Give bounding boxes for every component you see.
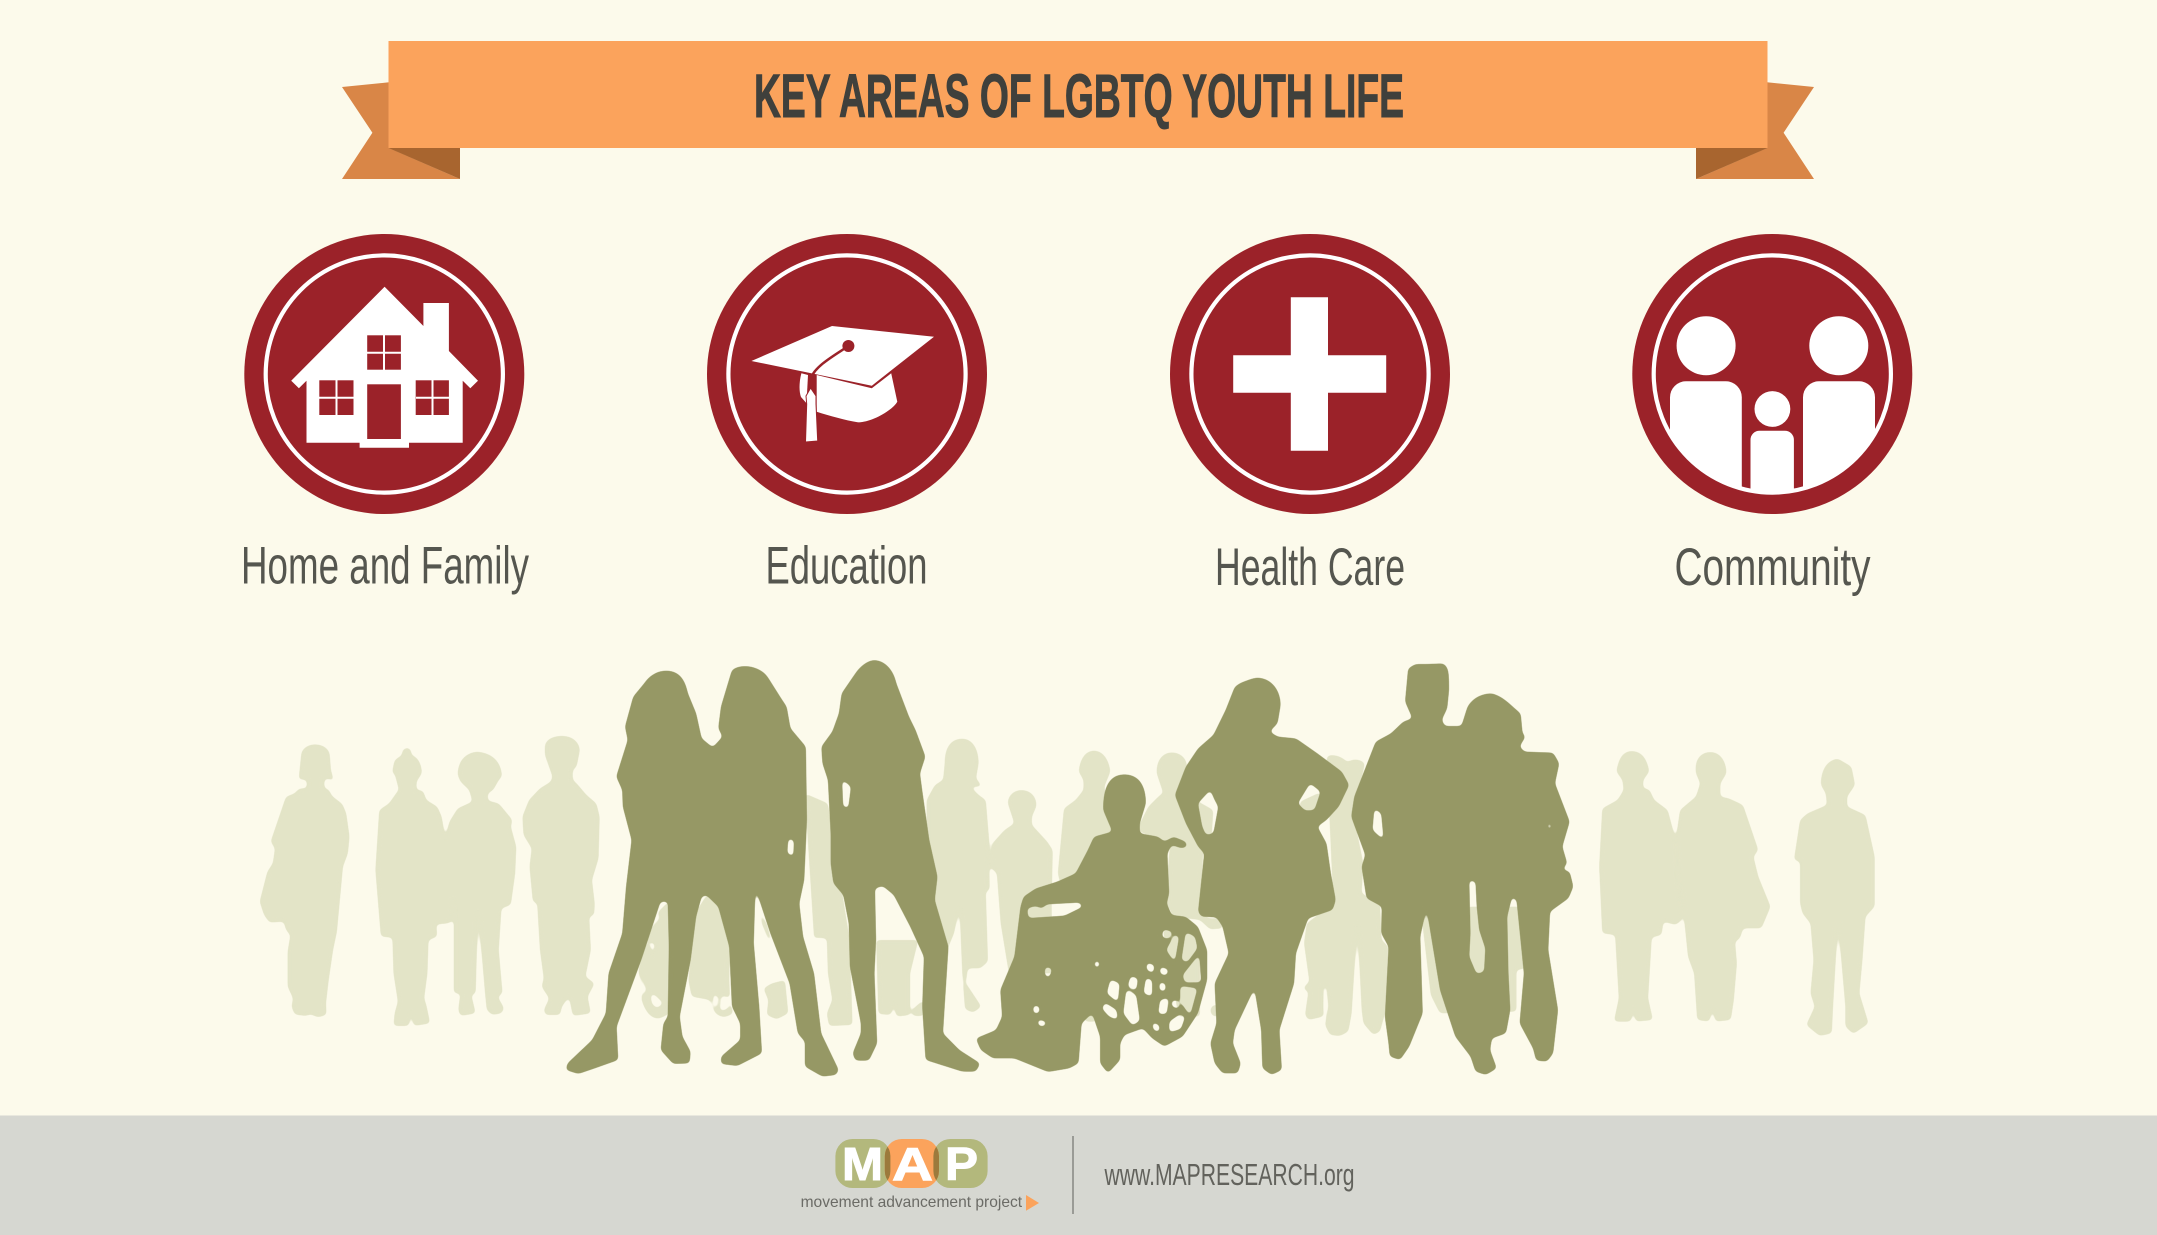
icon: health care [1170,234,1450,514]
house shape [291,287,478,448]
title text: KEY AREAS OF LGBTQ YOUTH LIFE [754,62,1404,130]
crowd silhouettes: background figures left [260,736,1053,1026]
logo arrow [1026,1195,1039,1211]
logo pill right [933,1139,988,1188]
wheelchair user [976,774,1207,1073]
footer bar [0,1116,2157,1235]
label: health care: Health Care [1215,538,1405,597]
cap left edge [800,373,808,403]
tassel string and button [811,346,848,390]
banner left fold [388,148,460,179]
logo letters: M [842,1138,883,1190]
family figures [1670,316,1875,490]
couple [1351,663,1573,1075]
logo letters: A [892,1138,933,1190]
label: education: Education [766,536,928,596]
banner main strip [388,41,1768,148]
logo tagline: movement advancement project [801,1194,1023,1211]
tassel [806,388,818,442]
icon: education [707,234,987,514]
icon: community [1632,234,1912,521]
label: community: Community [1674,538,1871,597]
banner right tail [1696,82,1814,179]
cap body [817,373,897,422]
logo letters: P [945,1138,978,1190]
house windows and door [319,335,449,439]
title banner [342,41,1814,179]
MAP logo [801,1138,1039,1211]
faded wheelchair and legs between foreground figures [638,895,788,1019]
medical cross [1233,297,1386,451]
logo pill middle [885,1139,939,1188]
website url: www.MAPRESEARCH.org [1104,1157,1354,1192]
logo letters [842,1138,978,1190]
crowd silhouettes: foreground wheelchair user, woman and couple [976,663,1573,1075]
window mullions [319,335,449,415]
banner left tail [342,82,460,179]
woman with hands on hips [1175,678,1349,1075]
logo pill left [835,1139,890,1188]
crowd silhouettes: foreground three long-haired figures [566,660,980,1077]
mortarboard [751,326,934,386]
logo overlaps [884,1146,939,1180]
icon: home and family [244,234,524,514]
banner right fold [1696,148,1768,179]
label: home and family: Home and Family [241,536,529,596]
crowd silhouettes: background figures right [1058,751,1875,1036]
footer divider [1072,1136,1074,1214]
